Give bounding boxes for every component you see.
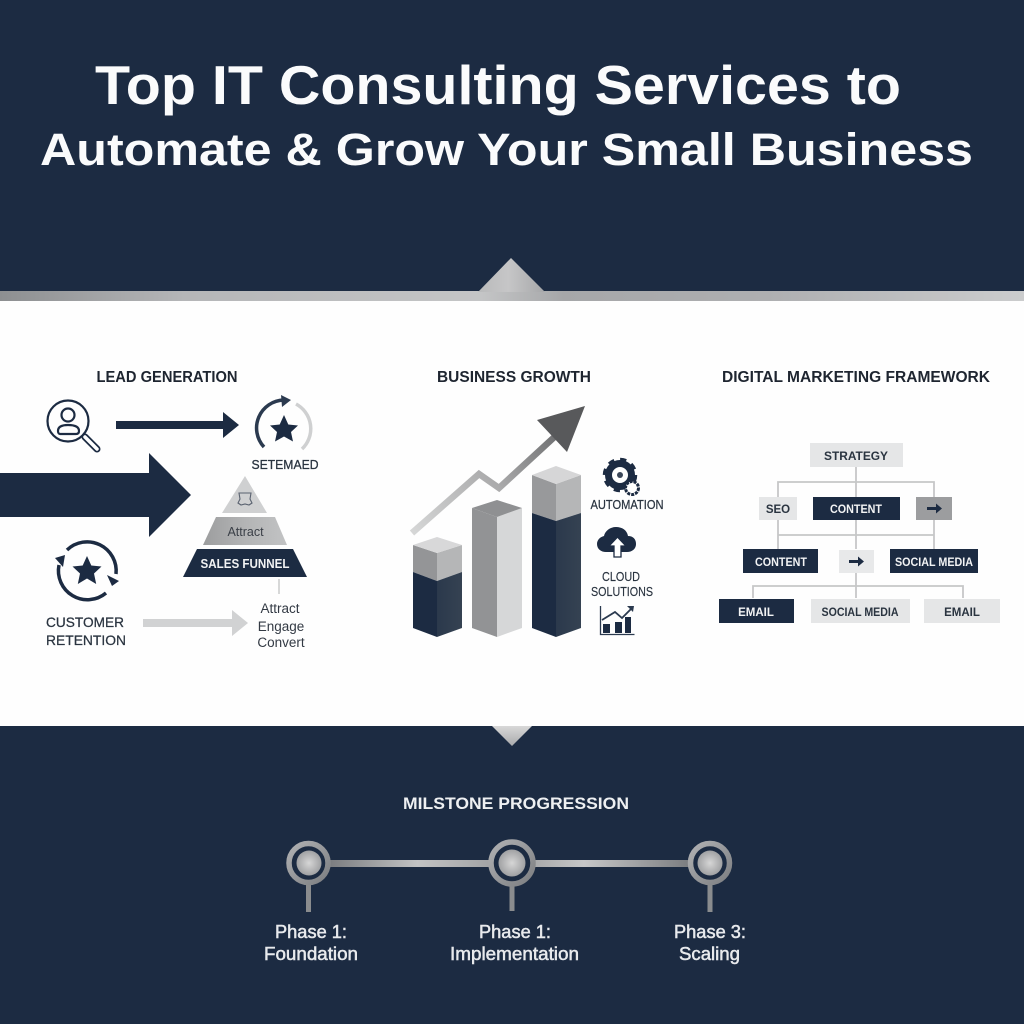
box: content bbox=[813, 497, 900, 520]
box: email light: EMAIL bbox=[944, 607, 980, 619]
white content panel bbox=[0, 301, 1024, 726]
icon: funnel top glyph bbox=[238, 493, 252, 505]
box: content level 2: CONTENT bbox=[755, 557, 807, 569]
panel: lead generation bbox=[0, 369, 318, 650]
icon: mini bar chart bbox=[600, 606, 634, 634]
bar 2 bbox=[472, 500, 522, 637]
title bbox=[40, 54, 973, 175]
label: phase 1 implementation: Implementation bbox=[450, 944, 579, 964]
icon: automation gears bbox=[605, 460, 638, 494]
label: cloud solutions bbox=[591, 570, 653, 599]
heading: milestone progression: MILSTONE PROGRESSION bbox=[403, 795, 629, 813]
label: customer retention: RETENTION bbox=[46, 632, 126, 648]
list: attract engage convert: Attract bbox=[260, 601, 300, 616]
list: attract engage convert: Convert bbox=[257, 635, 305, 650]
box: social media light: SOCIAL MEDIA bbox=[822, 607, 898, 619]
title: Top IT Consulting Services to bbox=[95, 54, 901, 116]
label: automation: AUTOMATION bbox=[590, 498, 664, 512]
panel: business growth bbox=[412, 369, 664, 637]
connector lines bbox=[753, 467, 963, 598]
box: seo: SEO bbox=[766, 504, 790, 516]
milestone 1 bbox=[264, 844, 358, 964]
label: customer retention bbox=[46, 614, 126, 648]
label: cloud solutions: CLOUD bbox=[602, 570, 640, 584]
box: seo bbox=[759, 497, 797, 520]
milestone 3 bbox=[674, 844, 746, 964]
box: social media level 2 bbox=[890, 549, 978, 573]
timeline connector bbox=[325, 860, 695, 867]
icon: customer retention star bbox=[55, 542, 119, 600]
label: customer retention: CUSTOMER bbox=[46, 614, 124, 630]
box: strategy: STRATEGY bbox=[824, 449, 888, 463]
label: phase 3 scaling: Phase 3: bbox=[674, 922, 746, 942]
bar 3 bbox=[532, 466, 581, 637]
label: phase 1 implementation: Phase 1: bbox=[479, 922, 551, 942]
label: phase 3 scaling: Scaling bbox=[679, 944, 740, 964]
heading: business growth: BUSINESS GROWTH bbox=[437, 369, 591, 386]
heading: lead generation: LEAD GENERATION bbox=[96, 369, 238, 386]
header band bbox=[0, 0, 1024, 292]
title: Automate & Grow Your Small Business bbox=[40, 124, 973, 175]
label: setemaed: SETEMAED bbox=[252, 457, 318, 472]
down triangle bbox=[492, 726, 532, 746]
list: attract engage convert: Engage bbox=[258, 619, 304, 634]
arrow: search to star bbox=[116, 412, 239, 438]
label: phase 3 scaling bbox=[674, 922, 746, 964]
box: email dark: EMAIL bbox=[738, 607, 774, 619]
icon: person search bbox=[48, 400, 97, 449]
box: email dark bbox=[719, 599, 794, 623]
box: grey arrow bbox=[916, 497, 952, 520]
heading: digital marketing framework: DIGITAL MARKETING FRAMEWORK bbox=[722, 369, 991, 386]
label: phase 1 foundation: Foundation bbox=[264, 944, 358, 964]
chart: sales funnel pyramid bbox=[183, 476, 307, 594]
label: cloud solutions: SOLUTIONS bbox=[591, 585, 653, 599]
icon: star cycle bbox=[257, 395, 311, 449]
arrow: growth trend bbox=[412, 406, 585, 533]
label: phase 1 foundation: Phase 1: bbox=[275, 922, 347, 942]
label: sales funnel: SALES FUNNEL bbox=[200, 557, 290, 571]
label: phase 1 implementation bbox=[450, 922, 579, 964]
label: attract: Attract bbox=[227, 525, 264, 539]
silver divider with triangle bbox=[0, 258, 1024, 301]
box: strategy bbox=[810, 443, 903, 467]
box: social media level 2: SOCIAL MEDIA bbox=[895, 557, 973, 569]
box: social media light bbox=[811, 599, 910, 623]
bar 1 bbox=[413, 537, 462, 637]
panel: milestone progression bbox=[0, 726, 1024, 1024]
big arrow bbox=[0, 453, 191, 537]
box: content: CONTENT bbox=[830, 504, 882, 516]
chart: 3d bars bbox=[413, 466, 581, 637]
icon: cloud upload bbox=[597, 527, 636, 557]
label: phase 1 foundation bbox=[264, 922, 358, 964]
box: content level 2 bbox=[743, 549, 818, 573]
panel: digital marketing framework bbox=[719, 369, 1000, 623]
milestone 2 bbox=[450, 842, 579, 964]
box: email light bbox=[924, 599, 1000, 623]
list: attract engage convert bbox=[257, 601, 305, 650]
arrow: retention to funnel bbox=[143, 610, 248, 636]
box: light arrow bbox=[839, 550, 874, 573]
